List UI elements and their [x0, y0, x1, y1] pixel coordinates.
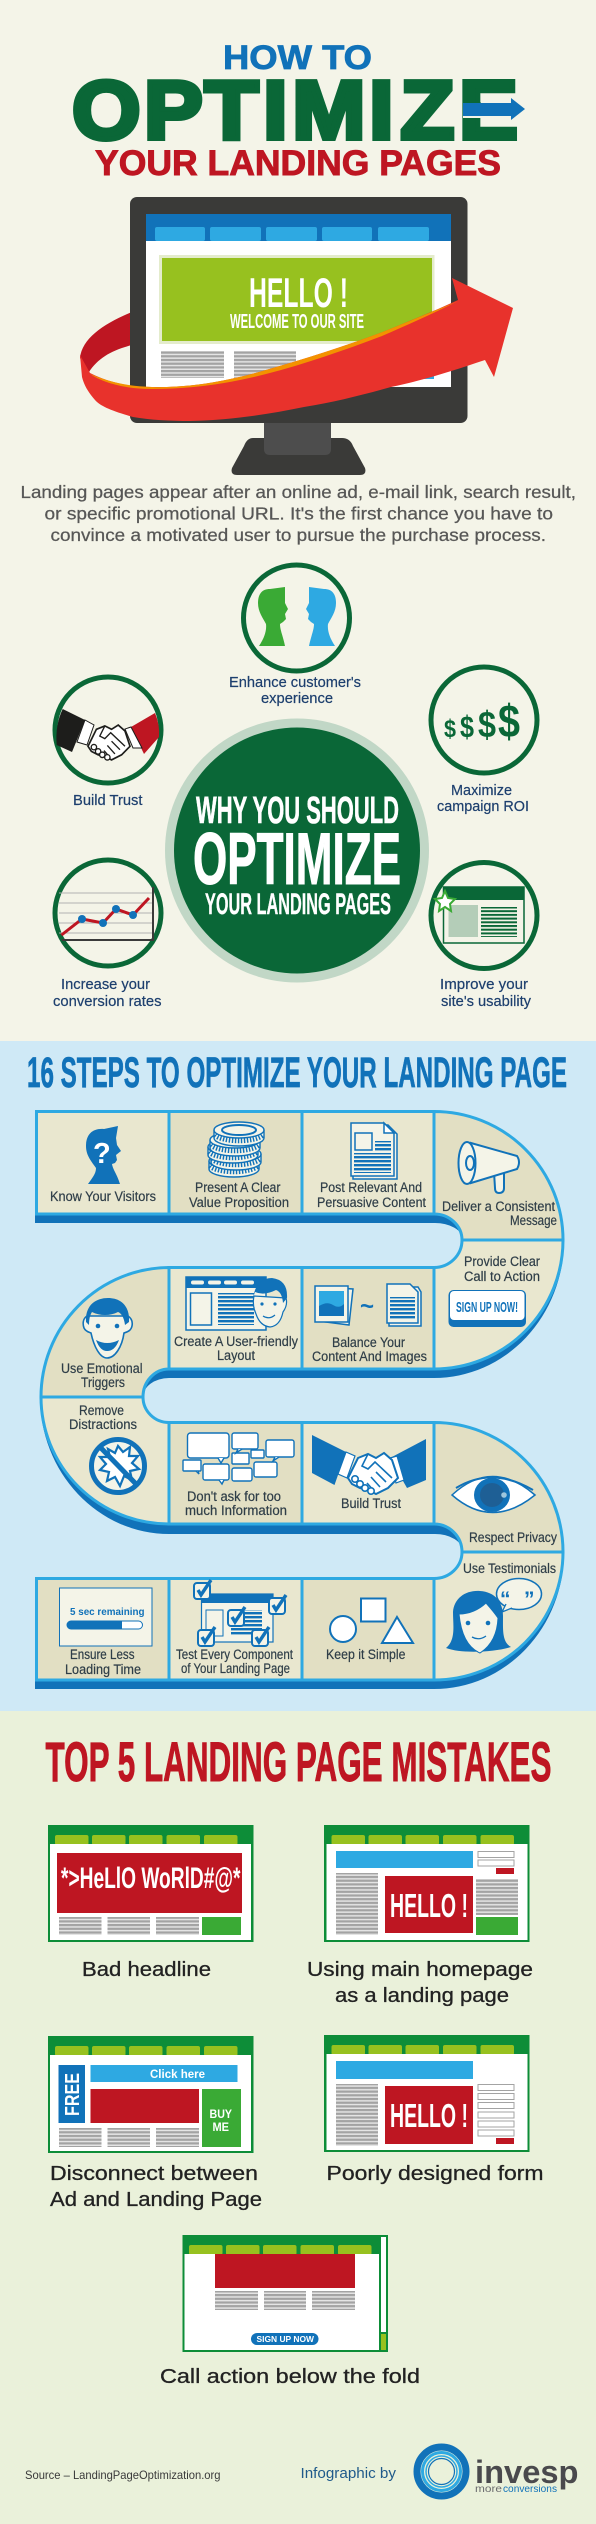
- step 6: balance content and images: [312, 1284, 427, 1364]
- benefit: maximize campaign ROI: [431, 667, 537, 815]
- step 16: loading time: Loading Time: [65, 1662, 141, 1677]
- snake shadow bands: [35, 1214, 564, 1689]
- title: [72, 39, 525, 183]
- intro paragraph: Landing pages appear after an online ad, e-mail link, search result,: [20, 482, 576, 502]
- step 3: persuasive content: Persuasive Content: [317, 1195, 426, 1210]
- icon: dollar signs: $: [444, 715, 456, 743]
- step 16: loading time: Ensure Less: [70, 1647, 135, 1662]
- footer source: Source – LandingPageOptimization.org: [25, 2468, 220, 2482]
- icon: no distractions: [92, 1440, 144, 1492]
- arrow front: [80, 278, 513, 421]
- step 4: consistent message: [442, 1142, 557, 1228]
- monitor body: [130, 197, 468, 423]
- mistake 3: disconnect ad and page: FREE: [62, 2073, 84, 2116]
- icon: woman with quote: “: [500, 1588, 510, 1611]
- icon: line chart: [59, 887, 153, 940]
- mistake 1: bad headline: Bad headline: [82, 1959, 211, 1981]
- mistake 1: bad headline: [48, 1825, 254, 1981]
- benefit: increase conversion rates: [53, 860, 162, 1010]
- mistake 3: disconnect ad and page: BUY: [210, 2107, 232, 2121]
- icon: handshake: [56, 709, 159, 760]
- step 10: don't ask too much: [183, 1433, 294, 1518]
- logo: invesp: [417, 2447, 578, 2496]
- mistake 2: homepage as landing page: HELLO !: [390, 1887, 468, 1924]
- monitor screen: [146, 214, 451, 387]
- benefit: build trust: [55, 677, 161, 809]
- title: YOUR LANDING PAGES: [95, 144, 501, 183]
- benefit: build trust: Build Trust: [73, 793, 142, 809]
- benefit: improve usability: [431, 862, 537, 1010]
- mistake 3: disconnect ad and page: ME: [212, 2120, 229, 2134]
- step 4: consistent message: Message: [510, 1213, 557, 1228]
- benefit: enhance customer's experience: Enhance customer's: [229, 675, 361, 691]
- step 9: remove distractions: [69, 1403, 144, 1492]
- arrow back ribbon: [80, 312, 132, 372]
- benefit: enhance customer's experience: [229, 565, 361, 707]
- step 8: emotional triggers: Use Emotional: [61, 1361, 142, 1376]
- step 3: persuasive content: [317, 1123, 426, 1210]
- step 1: know your visitors: ?: [93, 1138, 111, 1170]
- logo: invesp: invesp: [475, 2454, 578, 2490]
- snake cells: [36, 1112, 563, 1680]
- step 7: user-friendly layout: Layout: [217, 1348, 255, 1363]
- step 1: know your visitors: [50, 1126, 156, 1204]
- benefit: improve usability: Improve your: [440, 977, 528, 993]
- mistake 2: homepage as landing page: [307, 1825, 533, 2007]
- step 9: remove distractions: Remove: [79, 1403, 124, 1418]
- mistake 3: disconnect ad and page: [48, 2036, 262, 2211]
- step 3: persuasive content: Post Relevant And: [320, 1180, 422, 1195]
- icon: woman with quote: ”: [524, 1588, 534, 1611]
- button: sign up now: SIGN UP NOW!: [456, 1299, 518, 1316]
- step 13: use testimonials: [446, 1561, 556, 1653]
- step 10: don't ask too much: Don't ask for too: [187, 1489, 281, 1504]
- monitor stand: [232, 423, 365, 475]
- mistake 1: bad headline: *>HeLlO WoRlD#@*: [61, 1862, 241, 1895]
- step 15: test every component: of Your Landing Page: [181, 1661, 290, 1676]
- title: HOW TO: [223, 39, 372, 77]
- icon: woman with quote: [446, 1578, 542, 1653]
- icon: dollar signs: $: [478, 704, 496, 745]
- icon: dollar signs: [444, 695, 520, 747]
- intro paragraph: convince a motivated user to pursue the purchase process.: [50, 525, 546, 545]
- step 8: emotional triggers: [61, 1298, 142, 1390]
- center circle: why you should optimize: [165, 718, 429, 982]
- step 12: respect privacy: Respect Privacy: [469, 1530, 557, 1545]
- title: OPTIMIZE: [72, 65, 518, 157]
- step 4: consistent message: Deliver a Consistent: [442, 1199, 555, 1214]
- step 14: keep it simple: [326, 1598, 413, 1662]
- mistake 5: call to action below the fold: [160, 2235, 420, 2388]
- step 11: build trust: Build Trust: [341, 1496, 401, 1511]
- panel: top 5 mistakes: [0, 1711, 596, 2524]
- footer credit: Infographic by: [300, 2465, 396, 2482]
- step 6: balance content and images: Balance Your: [332, 1335, 405, 1350]
- mistake 3: disconnect ad and page: Click here: [150, 2067, 205, 2081]
- benefit: enhance customer's experience: experience: [261, 691, 333, 707]
- step 2: value proposition: [189, 1122, 289, 1210]
- step 5: clear call to action: Call to Action: [464, 1269, 540, 1284]
- monitor screen: WELCOME TO OUR SITE: [230, 311, 364, 333]
- intro paragraph: or specific promotional URL. It's the first chance you have to: [44, 504, 553, 524]
- panel: 16 steps: [0, 1041, 596, 1711]
- step 14: keep it simple: Keep it Simple: [326, 1647, 406, 1662]
- icon: dollar signs: $: [460, 709, 474, 744]
- step 16: loading time: [60, 1588, 152, 1677]
- page background: intro: [0, 0, 596, 1041]
- step 6: balance content and images: ~: [360, 1293, 374, 1320]
- benefit: maximize campaign ROI: campaign ROI: [437, 799, 529, 815]
- mistake 5: call to action below the fold: SIGN UP NOW: [256, 2334, 315, 2344]
- mistake 4: poorly designed form: Poorly designed form: [326, 2163, 544, 2185]
- logo: invesp: conversions: [503, 2484, 557, 2495]
- step 15: test every component: Test Every Component: [176, 1647, 293, 1662]
- step 13: use testimonials: Use Testimonials: [463, 1561, 556, 1576]
- mistake 3: disconnect ad and page: Disconnect between: [50, 2163, 258, 2185]
- mistake 2: homepage as landing page: Using main homepage: [307, 1959, 533, 1981]
- mistake 4: poorly designed form: [324, 2035, 544, 2185]
- step 10: don't ask too much: much Information: [185, 1503, 287, 1518]
- step 6: balance content and images: Content And Images: [312, 1349, 427, 1364]
- step 2: value proposition: Value Proposition: [189, 1195, 289, 1210]
- icon: dollar signs: $: [498, 695, 520, 747]
- step 11: build trust: [312, 1435, 426, 1511]
- step 5: clear call to action: [448, 1254, 540, 1327]
- step 1: know your visitors: Know Your Visitors: [50, 1189, 156, 1204]
- intro paragraph: [20, 482, 576, 545]
- benefit: maximize campaign ROI: Maximize: [451, 783, 512, 799]
- benefit: increase conversion rates: conversion rates: [53, 994, 162, 1010]
- illustration: monitor with arrow: [80, 197, 513, 475]
- center circle: why you should optimize: WHY YOU SHOULD: [196, 790, 399, 832]
- monitor screen: HELLO !: [249, 269, 348, 316]
- step 12: respect privacy: [452, 1476, 557, 1545]
- center circle: why you should optimize: OPTIMIZE: [193, 819, 401, 900]
- step 9: remove distractions: Distractions: [69, 1417, 137, 1432]
- mistake 4: poorly designed form: HELLO !: [390, 2097, 468, 2134]
- benefit: increase conversion rates: Increase your: [61, 977, 150, 993]
- step 15: test every component: [176, 1580, 293, 1676]
- center circle: why you should optimize: YOUR LANDING PAGES: [205, 888, 391, 921]
- step 16: loading time: 5 sec remaining: [70, 1606, 144, 1618]
- step 7: user-friendly layout: Create A User-friendly: [174, 1334, 298, 1349]
- mistake 5: call to action below the fold: Call action below the fold: [160, 2366, 420, 2388]
- step 7: user-friendly layout: [174, 1277, 298, 1363]
- mistake 2: homepage as landing page: as a landing page: [335, 1985, 509, 2007]
- icon: two heads: [258, 587, 336, 646]
- step 8: emotional triggers: Triggers: [81, 1375, 125, 1390]
- step 5: clear call to action: Provide Clear: [464, 1254, 540, 1269]
- step 2: value proposition: Present A Clear: [195, 1180, 281, 1195]
- mistake 3: disconnect ad and page: Ad and Landing Page: [50, 2189, 262, 2211]
- benefit: improve usability: site's usability: [441, 994, 532, 1010]
- logo: invesp: more: [475, 2484, 503, 2495]
- icon: website window with star: [435, 887, 524, 943]
